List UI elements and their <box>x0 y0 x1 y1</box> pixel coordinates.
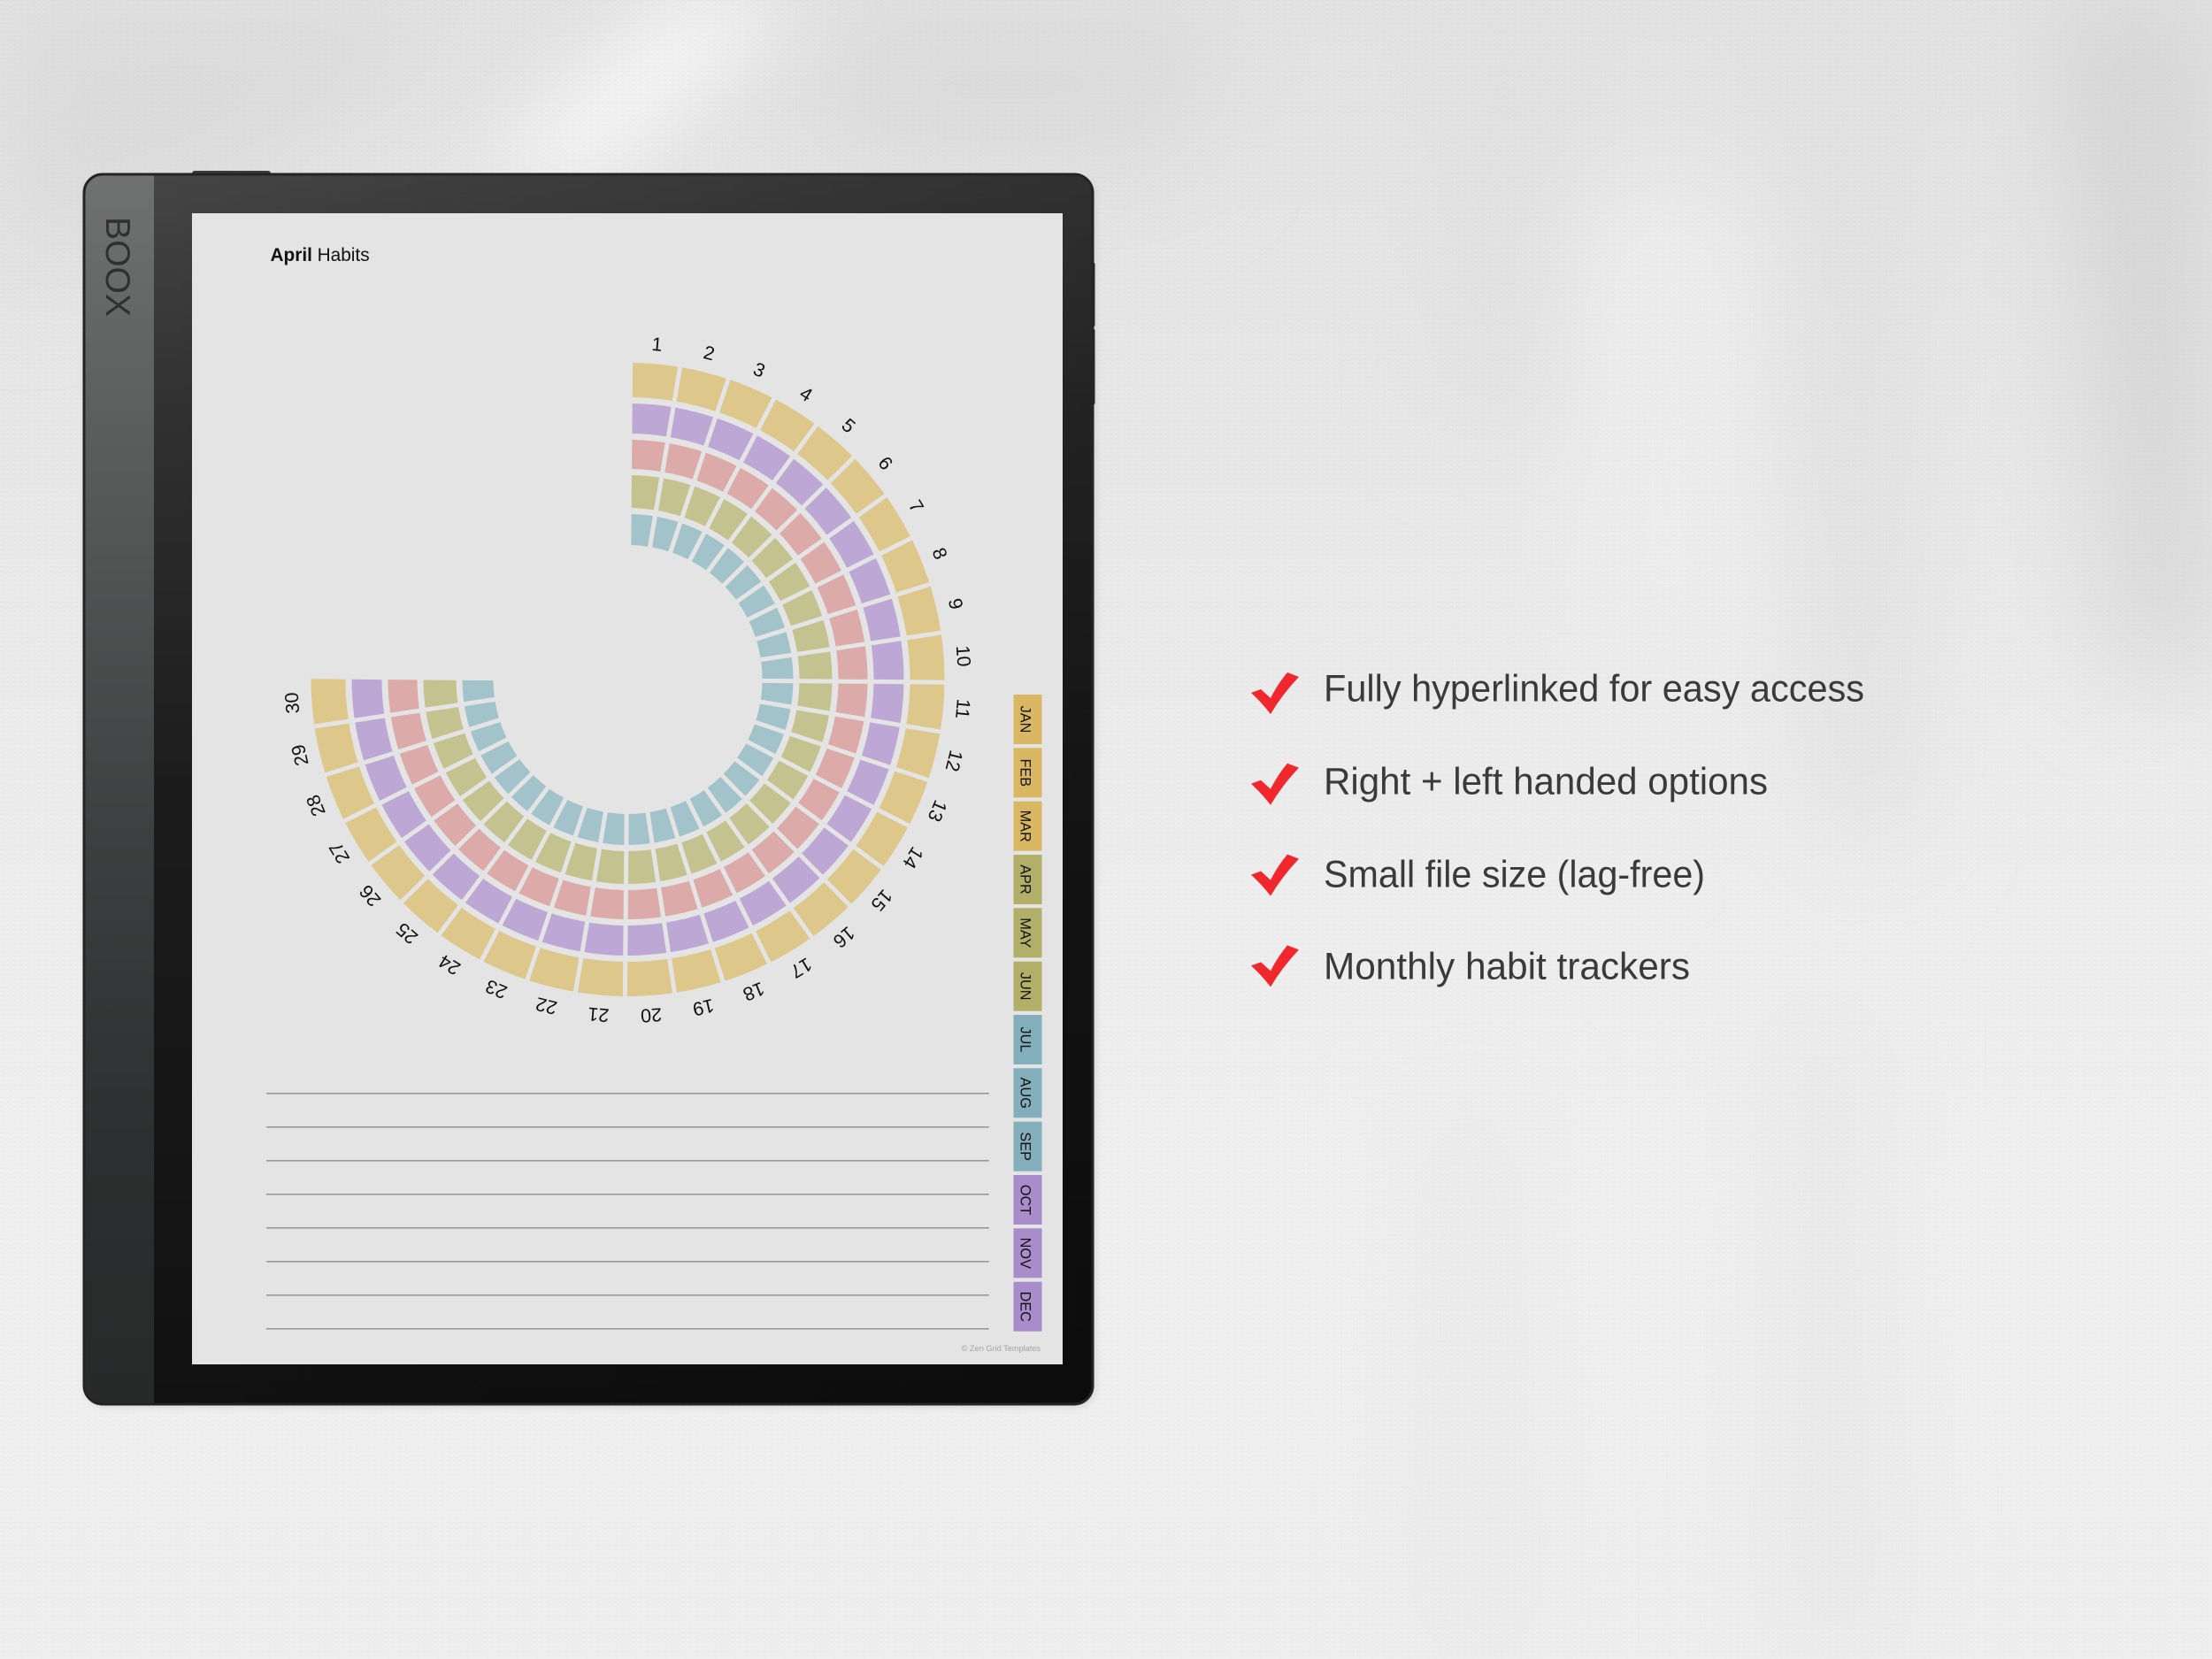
day number labels 1 to 30: 13 <box>924 797 951 825</box>
tab: JAN: JAN <box>1018 706 1033 733</box>
day number labels 1 to 30: 8 <box>927 545 951 563</box>
day number labels 1 to 30: 12 <box>941 748 967 773</box>
notes lines <box>266 1094 989 1329</box>
day number labels 1 to 30: 21 <box>587 1003 610 1026</box>
feature: hyperlinked: Fully hyperlinked for easy access <box>1324 668 1864 710</box>
tab: DEC: DEC <box>1018 1292 1033 1322</box>
day number labels 1 to 30: 16 <box>829 922 859 952</box>
bezel horizontal falloff <box>540 175 1092 782</box>
day number labels 1 to 30: 5 <box>837 414 859 437</box>
ring: habit 5 blue <box>462 514 794 845</box>
day number labels 1 to 30: 11 <box>951 698 974 719</box>
day number labels 1 to 30: 18 <box>740 978 767 1005</box>
tab: JUL: JUL <box>1018 1027 1033 1052</box>
feature list <box>1251 668 1864 988</box>
day number labels 1 to 30: 6 <box>874 452 897 474</box>
day number labels 1 to 30: 20 <box>640 1003 663 1026</box>
day number labels 1 to 30: 28 <box>303 792 330 819</box>
tab: MAY: MAY <box>1018 918 1033 948</box>
day number labels 1 to 30: 10 <box>952 645 974 667</box>
feature: trackers: Monthly habit trackers <box>1324 946 1690 988</box>
tab: MAR: MAR <box>1018 810 1033 842</box>
day number labels 1 to 30: 22 <box>534 993 559 1018</box>
day number labels 1 to 30: 30 <box>281 692 303 714</box>
device rim <box>84 174 1093 1404</box>
tab: DEC <box>1014 1282 1042 1332</box>
copyright note: © Zen Grid Templates <box>962 1344 1041 1353</box>
tab: MAY <box>1014 908 1042 957</box>
day number labels 1 to 30: 25 <box>392 918 422 949</box>
day number labels 1 to 30: 14 <box>898 843 927 872</box>
day number labels 1 to 30: 17 <box>787 953 816 982</box>
tab: AUG: AUG <box>1018 1078 1033 1109</box>
day number labels 1 to 30: 7 <box>904 496 928 517</box>
side buttons <box>1091 263 1095 404</box>
tab: NOV <box>1014 1228 1042 1278</box>
device body <box>83 173 1094 1405</box>
ring: habit 3 pink <box>388 439 868 920</box>
tab: SEP: SEP <box>1018 1132 1033 1161</box>
ring: habit 4 olive <box>423 475 833 885</box>
title: April Habits <box>271 245 370 265</box>
screen <box>192 213 1063 1364</box>
day number labels 1 to 30: 19 <box>691 995 716 1020</box>
tab: OCT <box>1014 1175 1042 1225</box>
tab: NOV: NOV <box>1018 1238 1033 1269</box>
month tabs <box>1014 695 1042 1332</box>
day number labels 1 to 30: 29 <box>288 742 313 768</box>
day number labels 1 to 30: 9 <box>944 596 967 611</box>
day number labels 1 to 30: 3 <box>750 358 768 382</box>
ring: habit 1 yellow <box>311 362 945 997</box>
day number labels 1 to 30: 4 <box>795 382 816 406</box>
day number labels 1 to 30: 26 <box>355 880 385 910</box>
tab: JAN <box>1014 695 1042 744</box>
tab: APR <box>1014 855 1042 904</box>
day number labels 1 to 30: 15 <box>866 885 896 915</box>
tab: OCT: OCT <box>1018 1185 1033 1215</box>
device: e-reader tablet <box>83 171 1095 1407</box>
day number labels 1 to 30: 24 <box>435 950 465 979</box>
top power button <box>192 171 271 178</box>
tab: JUN: JUN <box>1018 972 1033 1001</box>
tab: JUN <box>1014 962 1042 1011</box>
tab: AUG <box>1014 1068 1042 1118</box>
tab: FEB <box>1014 748 1042 797</box>
feature: handedness: Right + left handed options <box>1324 761 1768 803</box>
tab: MAR <box>1014 802 1042 851</box>
feature: file size: Small file size (lag-free) <box>1324 853 1705 895</box>
day number labels 1 to 30: 27 <box>325 838 354 867</box>
device shadow <box>85 177 1095 1407</box>
tab: SEP <box>1014 1122 1042 1171</box>
day number labels 1 to 30: 23 <box>482 975 511 1003</box>
ring: habit 2 purple <box>351 403 904 956</box>
day number labels 1 to 30 <box>281 334 974 1026</box>
tab: APR: APR <box>1018 864 1033 895</box>
day number labels 1 to 30: 1 <box>651 334 664 356</box>
tab: FEB: FEB <box>1018 758 1033 787</box>
day number labels 1 to 30: 2 <box>702 342 717 365</box>
circular habit tracker <box>281 334 974 1026</box>
tab: JUL <box>1014 1015 1042 1064</box>
BOOX logo: BOOX <box>98 217 136 317</box>
spine strip <box>83 173 154 1405</box>
